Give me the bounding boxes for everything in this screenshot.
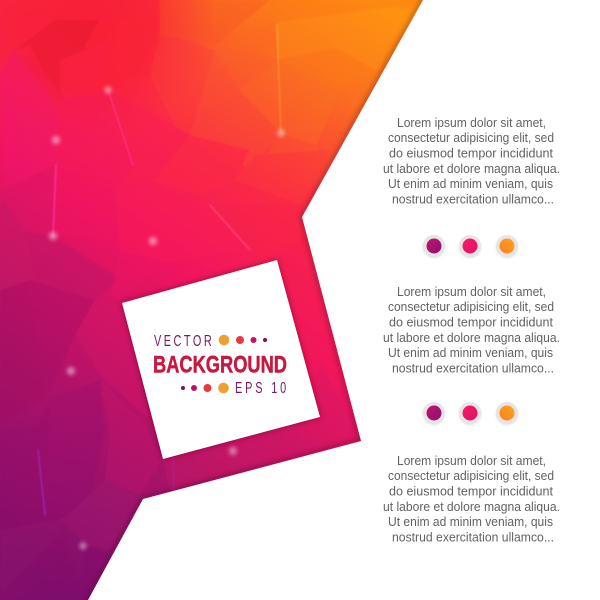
logo: eps line: EPS 10	[235, 379, 289, 397]
text block 3: Ut enim ad minim veniam, quis	[388, 515, 553, 529]
dots row 2	[423, 402, 518, 425]
text block 1: Lorem ipsum dolor sit amet,	[397, 116, 546, 130]
text block 2: do eiusmod tempor incididunt	[389, 316, 554, 330]
white rotated card with logo	[122, 260, 320, 459]
text block 1: nostrud exercitation ullamco...	[392, 192, 554, 206]
text block 3	[383, 454, 560, 544]
text block 3: Lorem ipsum dolor sit amet,	[397, 454, 546, 468]
white card shadow	[122, 260, 320, 459]
text block 2: Ut enim ad minim veniam, quis	[388, 346, 553, 360]
logo: background heading: BACKGROUND	[153, 352, 287, 378]
dots row 1	[423, 235, 518, 258]
text block 3: do eiusmod tempor incididunt	[389, 484, 554, 498]
logo: vector line: VECTOR	[154, 332, 214, 350]
logo: vector line	[154, 332, 267, 350]
text block 1	[383, 116, 560, 206]
text block 2: ut labore et dolore magna aliqua.	[383, 331, 560, 345]
sparkle lines	[38, 25, 281, 515]
text block 2: Lorem ipsum dolor sit amet,	[397, 285, 546, 299]
text block 3: nostrud exercitation ullamco...	[392, 530, 554, 544]
text block 2: consectetur adipisicing elit, sed	[388, 300, 554, 314]
sparkle glows	[49, 86, 284, 550]
text block 1: consectetur adipisicing elit, sed	[388, 131, 554, 145]
text block 2: nostrud exercitation ullamco...	[392, 362, 554, 376]
inner edge shadow	[83, 0, 423, 600]
text block 3: consectetur adipisicing elit, sed	[388, 469, 554, 483]
text block 1: ut labore et dolore magna aliqua.	[383, 162, 560, 176]
logo: eps line	[181, 379, 289, 397]
text block 1: Ut enim ad minim veniam, quis	[388, 177, 553, 191]
text block 2	[383, 285, 560, 376]
text block 3: ut labore et dolore magna aliqua.	[383, 500, 560, 514]
text block 1: do eiusmod tempor incididunt	[389, 146, 554, 160]
low-poly facets	[0, 0, 423, 600]
